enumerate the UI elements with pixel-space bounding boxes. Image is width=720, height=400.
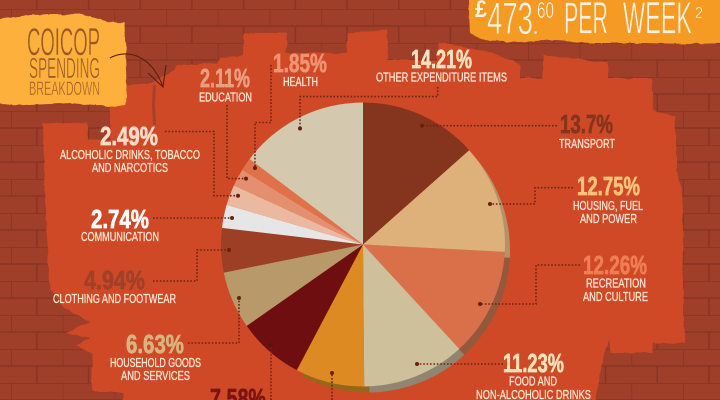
slice: clothing [221,228,363,273]
slice: housing [363,150,505,252]
label: recreation: AND CULTURE [583,290,648,304]
label: housing: HOUSING, FUEL [573,199,643,213]
slice: food [363,244,459,386]
leader: alcohol [165,132,240,198]
label: food: 11.23% [503,348,564,378]
slice: alcohol [227,185,363,244]
leader: education [227,105,248,181]
label: household: HOUSEHOLD GOODS [110,356,201,370]
slice: dark red [247,244,363,370]
banner: coicop spending breakdown [0,14,127,107]
label: food: FOOD AND [509,374,557,388]
banner: coicop spending breakdown: SPENDING [29,53,100,85]
label: alcohol: ALCOHOLIC DRINKS, TOBACCO [60,148,200,162]
label: health: 1.85% [273,48,327,78]
label: communication: COMMUNICATION [81,230,159,244]
slice: other [250,102,363,244]
footnote 2: 2 [695,5,703,22]
label: recreation: 12.26% [583,250,647,280]
leader: transport [420,124,557,128]
label: communication [81,204,159,244]
label: food [476,348,591,400]
label: health [273,48,327,89]
leader: clothing [153,248,231,281]
label: housing: AND POWER [580,212,637,226]
label: communication: 2.74% [91,204,149,234]
label: education [199,63,252,104]
label: other: OTHER EXPENDITURE ITEMS [376,70,507,84]
label: other: 14.21% [411,44,472,74]
label: other [376,44,507,84]
leader: household [188,296,241,343]
banner: weekly spending [468,0,720,44]
label: clothing [53,265,176,306]
slice: transport [363,102,469,244]
label: clothing: CLOTHING AND FOOTWEAR [53,292,176,306]
pie chart [221,102,510,393]
label: transport: TRANSPORT [559,137,615,151]
label: household: AND SERVICES [121,369,190,383]
leader: health [253,65,271,170]
label: education: EDUCATION [199,90,252,104]
leader: recreation [478,265,580,306]
label: alcohol [60,121,200,175]
label: household [110,329,201,383]
label: clothing: 4.94% [84,265,145,295]
label: housing: 12.75% [577,171,640,201]
leader: dark red slice [269,343,273,400]
slice: household goods [224,244,363,326]
label: household: 6.63% [126,329,184,359]
label: recreation: RECREATION [586,276,646,290]
decimal point [534,31,537,34]
leader: other [298,87,438,130]
leader: communication [153,216,234,220]
slice: recreation [363,244,505,349]
label: transport [559,109,615,151]
pie shadow [302,156,510,393]
slice: communication [222,205,363,244]
label: transport: 13.7% [560,109,613,139]
banner: coicop spending breakdown: COICOP [27,21,100,64]
leader: food [415,362,503,366]
label: housing [573,171,643,226]
arrow from banner to pie [110,54,166,87]
label: health: HEALTH [283,75,318,89]
paint gap sliver [152,85,156,125]
slice: health [242,159,363,244]
label: alcohol: AND NARCOTICS [92,161,168,175]
leader: orange slice [330,371,334,400]
slice: restaurants [297,244,364,387]
label: alcohol: 2.49% [100,121,158,151]
slice: education [234,170,363,244]
label: education: 2.11% [200,63,250,93]
label: recreation [583,250,648,304]
leader: housing [488,188,573,206]
banner heading: BREAKDOWN: BREAKDOWN [29,79,100,100]
